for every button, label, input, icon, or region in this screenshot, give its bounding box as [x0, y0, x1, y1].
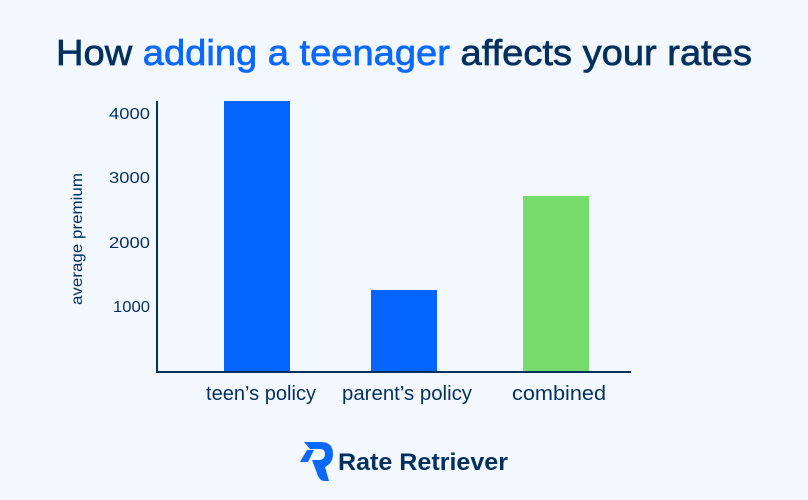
y-axis tick labels: 2000: [109, 235, 150, 252]
axes: [157, 101, 631, 372]
bar: combined: [523, 196, 589, 371]
logo: Rate Retriever: [300, 442, 508, 481]
x-axis category labels: combined: [512, 383, 606, 405]
x-axis category labels: parent’s policy: [342, 383, 472, 405]
icon: logo mark: [304, 442, 333, 481]
title: How adding a teenager affects your rates: [56, 32, 752, 73]
bar chart: [69, 101, 631, 405]
y-axis tick labels: 3000: [109, 170, 150, 187]
x-axis category labels: [206, 383, 606, 405]
bar: parent's policy: [371, 290, 437, 371]
y-axis tick labels: [109, 106, 150, 316]
logo wordmark: Rate Retriever: [338, 449, 508, 476]
y-axis tick labels: 1000: [113, 299, 150, 316]
y-axis title: average premium: [69, 173, 86, 305]
x-axis category labels: teen’s policy: [206, 383, 316, 405]
y-axis tick labels: 4000: [109, 106, 150, 123]
icon: logo wing: [300, 450, 314, 462]
bar: teen's policy: [224, 101, 290, 371]
